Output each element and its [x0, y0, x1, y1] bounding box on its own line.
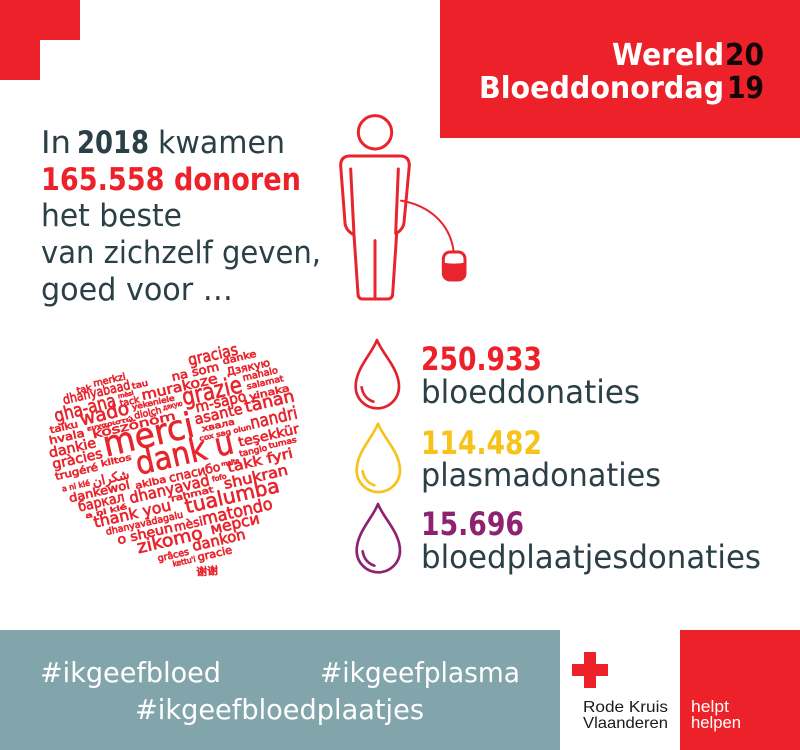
heart word cloud: tumas: [268, 435, 297, 450]
title banner: [440, 0, 800, 138]
Rode Kruis logo: [572, 652, 668, 732]
heart word cloud: хвала: [201, 416, 236, 434]
blood donations stat: [421, 340, 640, 411]
heart word cloud: takk fyri: [226, 446, 295, 476]
platelet donations stat: [421, 505, 761, 576]
Rode Kruis logo: Vlaanderen: [583, 715, 668, 732]
heart word cloud: rahmat: [170, 484, 215, 504]
heart word cloud: gracias: [186, 340, 240, 370]
icon: donor with blood bag: [341, 116, 465, 299]
heart word cloud: grâces: [157, 547, 190, 565]
heart word cloud: köszönöm: [91, 408, 177, 441]
heart word cloud: [47, 340, 301, 579]
heart word cloud: yekeniele: [131, 393, 176, 412]
intro text: [41, 125, 321, 308]
heart word cloud: thank you: [92, 496, 173, 532]
heart word cloud: zikomo: [135, 524, 205, 558]
heart word cloud: çox sag olun: [199, 423, 252, 443]
icon: purple platelet drop: [357, 504, 400, 572]
slogan block: helpt: [691, 697, 729, 716]
title banner: Bloeddonordag: [479, 71, 724, 106]
intro text: 2018: [77, 125, 149, 161]
platelet donations stat: 15.696: [421, 505, 524, 543]
heart word cloud: nandri: [248, 404, 300, 434]
heart word cloud: спасибо: [168, 460, 222, 485]
heart word cloud: yinaka: [248, 383, 291, 403]
plasma donations stat: plasmadonaties: [421, 456, 661, 494]
slogan block: helpen: [691, 713, 741, 732]
heart word cloud: tak: [76, 382, 93, 395]
heart word cloud: 谢谢: [196, 564, 219, 579]
heart word cloud: dankewol: [68, 478, 131, 505]
heart word cloud: dhanyabaad: [62, 378, 132, 408]
heart word cloud: gracie: [196, 543, 233, 564]
platelet donations stat: bloedplaatjesdonaties: [421, 538, 761, 576]
hashtag band: [0, 630, 560, 750]
heart word cloud: fofo: [211, 473, 227, 484]
intro text: goed voor …: [41, 272, 233, 308]
hashtag band: #ikgeefbloed: [40, 656, 221, 689]
heart word cloud: gha-ana: [52, 390, 118, 427]
heart word cloud: o sheun: [116, 521, 174, 548]
heart word cloud: tack: [119, 394, 141, 410]
heart word cloud: malta: [221, 458, 240, 468]
heart word cloud: merkzi: [92, 371, 127, 390]
heart word cloud: akiba: [134, 474, 168, 492]
heart word cloud: tangio: [238, 442, 268, 459]
heart word cloud: na som: [170, 359, 220, 384]
heart word cloud: trugéré: [54, 461, 99, 483]
intro text: het beste: [41, 198, 182, 234]
heart word cloud: мерси: [209, 509, 261, 538]
heart word cloud: m-sapo: [194, 388, 248, 416]
heart word cloud: danke: [222, 349, 258, 367]
heart word cloud: Дзякую: [225, 356, 271, 379]
title banner: 20: [725, 38, 764, 73]
heart word cloud: tualumba: [182, 473, 282, 518]
heart word cloud: mahalo: [242, 365, 279, 384]
heart word cloud: dhanyavad: [128, 471, 211, 507]
heart word cloud: dhanyavādagalu: [105, 509, 184, 538]
corner decoration: [0, 0, 80, 80]
Rode Kruis logo: Rode Kruis: [583, 699, 668, 716]
plasma donations stat: 114.482: [421, 424, 542, 462]
heart word cloud: gràcies: [51, 446, 104, 473]
title banner: 19: [727, 71, 764, 106]
slogan block: [680, 630, 800, 750]
intro text: van zichzelf geven,: [41, 235, 321, 271]
hashtag band: #ikgeefplasma: [320, 656, 520, 689]
heart word cloud: mèsi: [117, 390, 135, 400]
heart word cloud: дякую: [162, 400, 183, 412]
heart word cloud: grazie: [179, 371, 245, 412]
icon: red blood drop: [356, 340, 399, 408]
hashtag band: #ikgeefbloedplaatjes: [135, 693, 424, 726]
intro text: In: [41, 125, 71, 161]
heart word cloud: diolch: [133, 405, 163, 422]
heart word cloud: ευχαριστώ: [86, 415, 134, 433]
heart word cloud: баркал: [77, 489, 126, 516]
heart word cloud: tau: [131, 378, 149, 391]
heart word cloud: tānan: [243, 386, 296, 417]
heart word cloud: a ni kié: [61, 478, 91, 494]
icon: yellow plasma drop: [357, 424, 400, 492]
heart word cloud: a ni kié: [85, 503, 128, 520]
heart word cloud: mèsi: [173, 514, 204, 535]
heart word cloud: matondo: [200, 494, 275, 530]
heart word cloud: shukran: [222, 462, 290, 493]
heart word cloud: dankie: [47, 435, 98, 462]
heart word cloud: merci: [99, 406, 198, 465]
heart word cloud: murakoze: [140, 371, 219, 404]
title banner: Wereld: [612, 38, 724, 73]
heart word cloud: dankon: [190, 526, 247, 555]
heart word cloud: salamat: [246, 373, 285, 391]
heart word cloud: شكران: [91, 467, 131, 491]
heart word cloud: kiitos: [100, 452, 132, 469]
heart word cloud: asante: [193, 401, 244, 428]
heart word cloud: hvala: [48, 426, 86, 447]
plasma donations stat: [421, 424, 661, 494]
blood donations stat: 250.933: [421, 340, 542, 378]
blood donations stat: bloeddonaties: [421, 373, 640, 411]
intro text: 165.558 donoren: [41, 162, 301, 198]
heart word cloud: wado: [78, 398, 131, 431]
heart word cloud: kettu'i: [172, 555, 197, 569]
intro text: kwamen: [158, 125, 285, 161]
heart word cloud: dank u: [132, 423, 237, 483]
heart word cloud: taiku: [49, 419, 79, 436]
heart word cloud: teşekkür: [237, 422, 301, 451]
